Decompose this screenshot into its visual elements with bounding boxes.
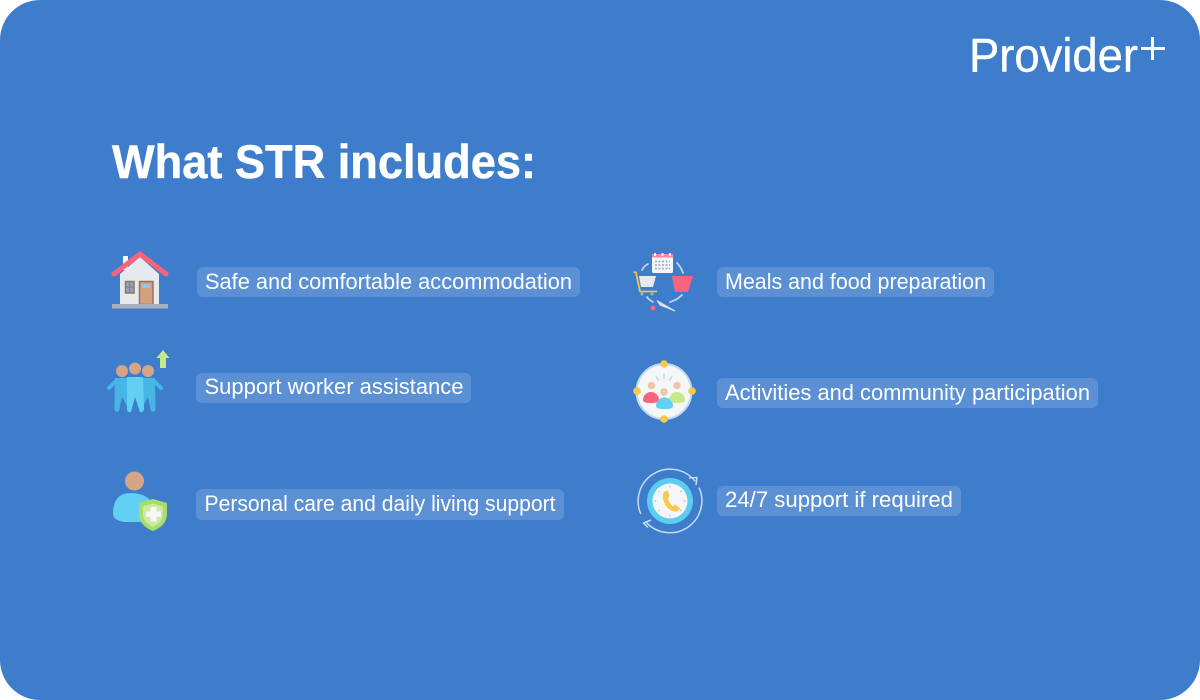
label pill: Activities and community participation — [725, 380, 1090, 405]
label pill: Personal care and daily living support — [204, 491, 556, 516]
label pill: Safe and comfortable accommodation — [205, 269, 572, 294]
item: personal care — [113, 472, 564, 531]
label pill: 24/7 support if required — [725, 487, 953, 512]
item: 24/7 support — [638, 469, 961, 533]
logo: Provider+: Provider — [969, 28, 1138, 82]
item: accommodation — [112, 254, 580, 308]
label pill: Meals and food preparation — [725, 269, 986, 294]
icon: clock with phone — [638, 469, 702, 533]
icon: community circle — [633, 360, 696, 423]
icon: house — [112, 254, 168, 308]
item: meals — [634, 253, 994, 311]
icon: person with shield — [113, 472, 167, 531]
icon: support workers with arrow — [109, 350, 170, 412]
title: What STR includes: — [112, 136, 536, 189]
item: activities — [633, 360, 1098, 423]
icon: meal planning cycle — [634, 253, 693, 311]
label pill: Support worker assistance — [204, 374, 464, 399]
item: support worker — [109, 350, 471, 412]
